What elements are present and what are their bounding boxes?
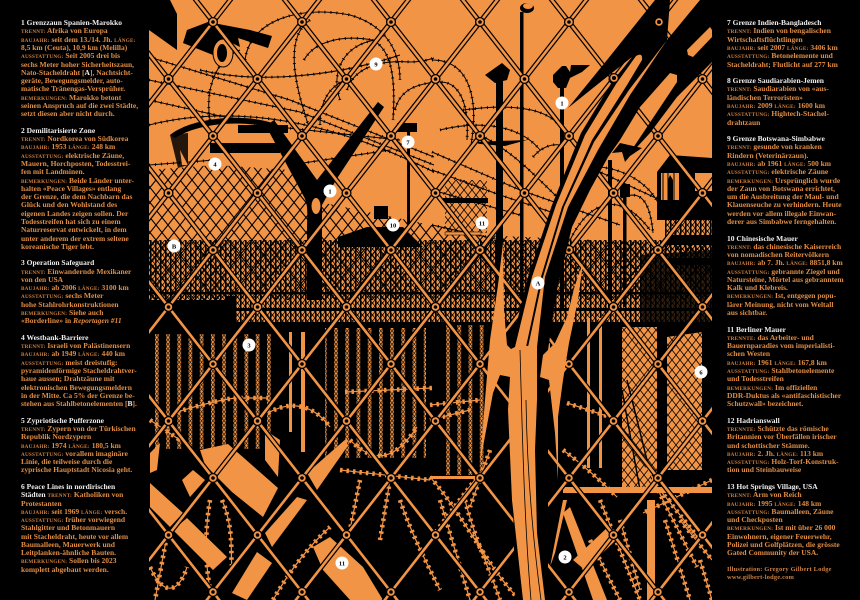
marker: 9 bbox=[370, 58, 382, 70]
entry 9 bbox=[727, 134, 842, 226]
entry 13 bbox=[727, 482, 840, 557]
entry 2: unter anderem der extrem seltene bbox=[21, 234, 129, 242]
entry 5: zyprische Hauptstadt Nicosia geht. bbox=[21, 465, 132, 474]
entry 9: Rindern (Veterinärzaun). bbox=[727, 151, 808, 160]
razor wire in foreground bbox=[150, 388, 712, 600]
entry 6: 6 Peace Lines in nordirischen bbox=[21, 482, 115, 491]
entry 8: ländischen Terroristen» bbox=[727, 93, 803, 102]
entry 1: TRENNT: Afrika von Europa bbox=[21, 26, 108, 35]
marker: 7 bbox=[402, 136, 414, 148]
entry 10: BAUJAHR: ab 7. Jh. LÄNGE: 8851,8 km bbox=[727, 258, 843, 267]
entry 2: Glück und den Wohlstand des bbox=[21, 200, 117, 209]
entry 1: BEMERKUNGEN: Marokko betont bbox=[21, 93, 121, 102]
entry 10: BEMERKUNGEN: Ist, entgegen popu- bbox=[727, 291, 836, 300]
entry 9: der Zaun von Botswana errichtet, bbox=[727, 184, 835, 193]
entry 1 bbox=[21, 18, 138, 118]
entry 9: AUSSTATTUNG: elektrische Zäune bbox=[727, 167, 828, 176]
entry 2: fen mit Landminen. bbox=[21, 167, 85, 176]
entry 13: Einwohnern, eigener Feuerwehr, bbox=[727, 532, 832, 541]
black ground and barrier wall bbox=[149, 322, 712, 600]
entry 3: BAUJAHR: ab 2006 LÄNGE: 3100 km bbox=[21, 283, 129, 292]
right barb bbox=[540, 263, 583, 480]
illustration: view through chain-link fence bbox=[149, 0, 712, 600]
razor blade centre and left barbs in orange bbox=[480, 243, 545, 600]
barbed wire coils bbox=[149, 12, 663, 240]
marker: 10 bbox=[386, 218, 400, 232]
entry 9: BEMERKUNGEN: Ursprünglich wurde bbox=[727, 176, 840, 185]
entry 5: Linie, die teilweise durch die bbox=[21, 457, 112, 466]
entry 6: AUSSTATTUNG: früher vorwiegend bbox=[21, 515, 125, 524]
small lamp post and box bbox=[338, 123, 423, 247]
entry 2: TRENNT: Nordkorea von Südkorea bbox=[21, 134, 128, 143]
marker: B bbox=[168, 240, 180, 252]
entry 4 bbox=[21, 333, 137, 408]
entry 3: hohe Stahlrohrkonstruktionen bbox=[21, 300, 119, 309]
entry 11 bbox=[727, 325, 842, 408]
entry 13: Gated Community der USA. bbox=[727, 548, 818, 557]
marker: 9: 9 bbox=[374, 61, 378, 68]
entry 7: BAUJAHR: seit 2007 LÄNGE: 3406 km bbox=[727, 43, 838, 52]
entry 13: und Checkposten bbox=[727, 515, 783, 524]
entry 13: BAUJAHR: 1995 LÄNGE: 148 km bbox=[727, 498, 821, 508]
entry 12: AUSSTATTUNG: Holz-Torf-Konstruk- bbox=[727, 457, 839, 466]
entry 4: 4 Westbank-Barriere bbox=[21, 333, 88, 342]
Y-shaped fence post bbox=[266, 102, 384, 300]
entry 1: BAUJAHR: seit dem 13./14. Jh. LÄNGE: bbox=[21, 35, 136, 44]
marker: 3: 3 bbox=[247, 342, 251, 349]
entry 8: BAUJAHR: 2009 LÄNGE: 1600 km bbox=[727, 101, 825, 110]
marker: A: A bbox=[536, 280, 541, 287]
entry 6: Protestanten bbox=[21, 498, 62, 508]
marker: 1 Y post: 1 bbox=[328, 188, 332, 195]
entry 3: 3 Operation Safeguard bbox=[21, 258, 94, 267]
entry 6: BAUJAHR: seit 1969 LÄNGE: versch. bbox=[21, 507, 127, 516]
marker: A bbox=[532, 276, 544, 290]
guard post building with arched roof bbox=[170, 118, 288, 168]
entry 7: 7 Grenze Indien-Bangladesch bbox=[727, 18, 821, 27]
marker: 2: 2 bbox=[563, 554, 567, 561]
entry 3: TRENNT: Einwandernde Mexikaner bbox=[21, 267, 131, 276]
entry 11: TRENNTE: das Arbeiter- und bbox=[727, 333, 814, 342]
entry 2: Naturreservat entwickelt, in dem bbox=[21, 225, 127, 234]
marker: 10: 10 bbox=[390, 222, 396, 229]
entry 8: TRENNT: Saudiarabien von «aus- bbox=[727, 84, 829, 93]
marker: 1 camera pole bbox=[556, 96, 568, 110]
entry 10: Natursteine, Mörtel aus gebranntem bbox=[727, 275, 844, 284]
entry 2: koreanische Tiger lebt. bbox=[21, 242, 94, 251]
entry 6: mit Stacheldraht, heute vor allem bbox=[21, 532, 128, 541]
entry 3: AUSSTATTUNG: sechs Meter bbox=[21, 291, 104, 300]
entry 10: AUSSTATTUNG: gebrannte Ziegel und bbox=[727, 267, 840, 276]
entry 5 bbox=[21, 416, 136, 474]
entry 11: BEMERKUNGEN: Im offiziellen bbox=[727, 383, 817, 392]
entry 8: AUSSTATTUNG: Hightech-Stachel- bbox=[727, 109, 829, 118]
blade centre lines bbox=[520, 350, 541, 600]
entry 11: 11 Berliner Mauer bbox=[727, 325, 786, 334]
marker: 1 camera pole: 1 bbox=[560, 100, 564, 107]
entry 5: TRENNT: Zypern von der Türkischen bbox=[21, 424, 136, 433]
entry 12: Britannien vor Überfällen irischer bbox=[727, 432, 837, 441]
entry 11: AUSSTATTUNG: Stahlbetonelemente bbox=[727, 366, 834, 375]
entry 12: 12 Hadrianswall bbox=[727, 416, 780, 425]
entry 10: lärer Meinung, nicht vom Weltall bbox=[727, 300, 833, 309]
entry 10 bbox=[727, 234, 844, 317]
chain-link fence foreground bbox=[149, 0, 712, 600]
dense fence band on horizon bbox=[149, 240, 712, 326]
entry 11: BAUJAHR: 1961 LÄNGE: 167,8 km bbox=[727, 358, 827, 367]
entry 11: schen Westen bbox=[727, 349, 770, 358]
entry 1: sechs Meter hoher Sicherheitszaun, bbox=[21, 60, 134, 69]
marker: 11 upper: 11 bbox=[479, 220, 485, 227]
entry 7: TRENNT: Indien von bengalischen bbox=[727, 26, 831, 35]
entry 3: BEMERKUNGEN: Siehe auch bbox=[21, 308, 103, 317]
marker: 11 upper bbox=[476, 216, 488, 230]
entry 1: matische Tränengas-Versprüher. bbox=[21, 84, 125, 93]
marker: 3 bbox=[242, 338, 256, 352]
entry 2: halten «Peace Villages» entlang bbox=[21, 184, 121, 193]
entry 11: und Todesstreifen bbox=[727, 374, 784, 383]
entry 5: Republik Nordzypern bbox=[21, 432, 91, 441]
entry 5: BAUJAHR: 1974 LÄNGE: 180,5 km bbox=[21, 441, 121, 450]
entry 4: elektronischen Bewegungsmeldern bbox=[21, 383, 132, 392]
illustration credit bbox=[727, 566, 832, 581]
entry 3: «Borderline» in Reportagen #11 bbox=[21, 316, 122, 325]
entry 9: werden vor allem illegale Einwan- bbox=[727, 209, 836, 218]
entry 12 bbox=[727, 416, 839, 474]
entry 2: BEMERKUNGEN: Beide Länder unter- bbox=[21, 176, 134, 185]
entry 8: 8 Grenze Saudiarabien-Jemen bbox=[727, 76, 824, 85]
entry 8: drahtzaun bbox=[727, 118, 760, 127]
entry 13: Polizei und Golfplätzen, die grösste bbox=[727, 540, 840, 549]
entry 5: AUSSTATTUNG: vorallem imaginäre bbox=[21, 449, 128, 458]
entry 11: DDR-Duktus als «antifaschistischer bbox=[727, 391, 841, 400]
distant watchtower left of centre bbox=[443, 180, 488, 235]
entry 10: 10 Chinesische Mauer bbox=[727, 234, 798, 242]
fence knots over the blade bbox=[610, 18, 663, 82]
entry 10: Kalk und Klebreis. bbox=[727, 283, 788, 292]
entry 9: TRENNT: gesunde von kranken bbox=[727, 142, 822, 151]
entry 6: komplett abgebaut werden. bbox=[21, 565, 109, 574]
marker: 4 bbox=[208, 158, 222, 170]
entry 9: derer aus Simbabwe ferngehalten. bbox=[727, 217, 836, 226]
entry 1: geräte, Bewegungsmelder, auto- bbox=[21, 76, 123, 85]
entry 7: Stacheldraht; Flutlicht auf 277 km bbox=[727, 60, 838, 69]
entry 7 bbox=[727, 18, 838, 69]
vertical steel slats fence bbox=[155, 318, 602, 475]
marker: B: B bbox=[172, 243, 177, 250]
entry 1: seinen Anspruch auf die zwei Städte, bbox=[21, 101, 138, 110]
entry 11: Schutzwall» bezeichnet. bbox=[727, 399, 803, 408]
entry 5: 5 Zypriotische Pufferzone bbox=[21, 416, 104, 425]
marker: 4: 4 bbox=[213, 161, 217, 168]
entry 13: AUSSTATTUNG: Baumalleen, Zäune bbox=[727, 507, 833, 516]
orange sky background bbox=[149, 0, 712, 322]
entry 7: Wirtschaftsflüchtlingen bbox=[727, 35, 803, 44]
entry 6 bbox=[21, 482, 128, 574]
entry 2: eigenen Landes zeigen sollen. Der bbox=[21, 209, 128, 218]
entry 10: TRENNT: das chinesische Kaiserreich bbox=[727, 242, 841, 251]
entry 13: 13 Hot Springs Village, USA bbox=[727, 482, 818, 491]
entry 1: setzt diesen aber nicht durch. bbox=[21, 109, 115, 118]
panel: right text column bbox=[727, 18, 844, 581]
entry 3 bbox=[21, 258, 132, 325]
entry 2: der Grenze, die dem Nachbarn das bbox=[21, 192, 132, 201]
entry 7: AUSSTATTUNG: Betonelemente und bbox=[727, 51, 833, 60]
entry 12: tion und Steinbauweise bbox=[727, 465, 801, 474]
entry 9: BAUJAHR: ab 1961 LÄNGE: 500 km bbox=[727, 159, 831, 168]
entry 6: Baumalleen, Mauerwerk und bbox=[21, 540, 115, 549]
entry 10: aus sichtbar. bbox=[727, 308, 767, 317]
entry 2 bbox=[21, 126, 134, 251]
entry 11: Bauernparadies vom imperialisti- bbox=[727, 341, 835, 350]
entry 1: 1 Grenzzaun Spanien-Marokko bbox=[21, 18, 122, 27]
entry 4: BAUJAHR: ab 1949 LÄNGE: 440 km bbox=[21, 349, 125, 358]
entry 4: haue aussen; Drahtzäune mit bbox=[21, 374, 115, 383]
entry 4: pyramidenförmige Stacheldrahtver- bbox=[21, 366, 137, 375]
entry 6: Stahlgitter und Betonmauern bbox=[21, 523, 115, 532]
marker: 1 Y post bbox=[324, 184, 336, 198]
entry 2: Todesstreifen hat sich zu einem bbox=[21, 217, 121, 226]
mesh panels on the right bbox=[430, 327, 712, 493]
lamp and camera poles bbox=[473, 3, 630, 320]
panel: left text column bbox=[21, 18, 138, 574]
entry 2: AUSSTATTUNG: elektrische Zäune, bbox=[21, 151, 124, 160]
marker: 7: 7 bbox=[406, 139, 410, 146]
marker: 11 lower: 11 bbox=[339, 560, 345, 567]
entry 4: TRENNT: Israeli von Palästinensern bbox=[21, 341, 130, 350]
entry 10: von nomadischen Reitervölkern bbox=[727, 250, 829, 259]
watchtower on the right bbox=[657, 155, 712, 275]
entry 1: AUSSTATTUNG: Seit 2005 drei bis bbox=[21, 51, 120, 60]
bird shaped barb bbox=[612, 143, 642, 162]
entry 2: BAUJAHR: 1953 LÄNGE: 248 km bbox=[21, 142, 115, 151]
entry 12: TRENNTE: Schützte das römische bbox=[727, 424, 829, 433]
entry 1: Nato-Stacheldraht [A], Nachtsicht- bbox=[21, 68, 133, 77]
security camera bbox=[149, 0, 272, 67]
entry 13: BEMERKUNGEN: Ist mit über 26 000 bbox=[727, 523, 835, 532]
entry 6: Städten TRENNT: Katholiken von bbox=[21, 490, 123, 499]
marker: 6: 6 bbox=[699, 369, 703, 376]
mesh fence mid distance bbox=[149, 165, 712, 300]
entry 13: TRENNT: Arm von Reich bbox=[727, 490, 802, 499]
marker: 6 bbox=[694, 366, 708, 378]
entry 6: BEMERKUNGEN: Sollen bis 2023 bbox=[21, 556, 117, 565]
entry 9: Klauenseuche zu verhindern. Heute bbox=[727, 200, 842, 209]
entry 6: Leitplanken-ähnliche Bauten. bbox=[21, 548, 116, 557]
entry 4: in der Mitte. Ca 5% der Grenze be- bbox=[21, 391, 135, 400]
diagonal concrete slabs bbox=[150, 430, 655, 600]
entry 12: BAUJAHR: 2. Jh. LÄNGE: 113 km bbox=[727, 449, 823, 458]
entry 9: um die Ausbreitung der Maul- und bbox=[727, 192, 839, 201]
entry 8 bbox=[727, 76, 829, 127]
entry 1: 8,5 km (Ceuta), 10,9 km (Melilla) bbox=[21, 43, 127, 52]
marker: 2 bbox=[558, 550, 572, 564]
entry 12: und schottischer Stämme. bbox=[727, 441, 810, 450]
entry 4: stehen aus Stahlbetonelementen [B]. bbox=[21, 399, 137, 408]
entry 2: 2 Demilitarisierte Zone bbox=[21, 126, 95, 135]
illustration credit: Illustration: Gregory Gilbert Lodge bbox=[727, 566, 832, 573]
large razor blade black curve bbox=[510, 0, 712, 600]
entry 4: AUSSTATTUNG: meist dreistufig: bbox=[21, 358, 118, 367]
marker: 11 lower bbox=[336, 556, 348, 570]
razor blade slots bbox=[515, 27, 712, 347]
entry 3: von den USA bbox=[21, 275, 63, 284]
illustration credit: www.gilbert-lodge.com bbox=[727, 574, 794, 581]
entry 2: Mauern, Horchposten, Todesstrei- bbox=[21, 159, 130, 168]
entry 9: 9 Grenze Botswana-Simbabwe bbox=[727, 134, 825, 143]
